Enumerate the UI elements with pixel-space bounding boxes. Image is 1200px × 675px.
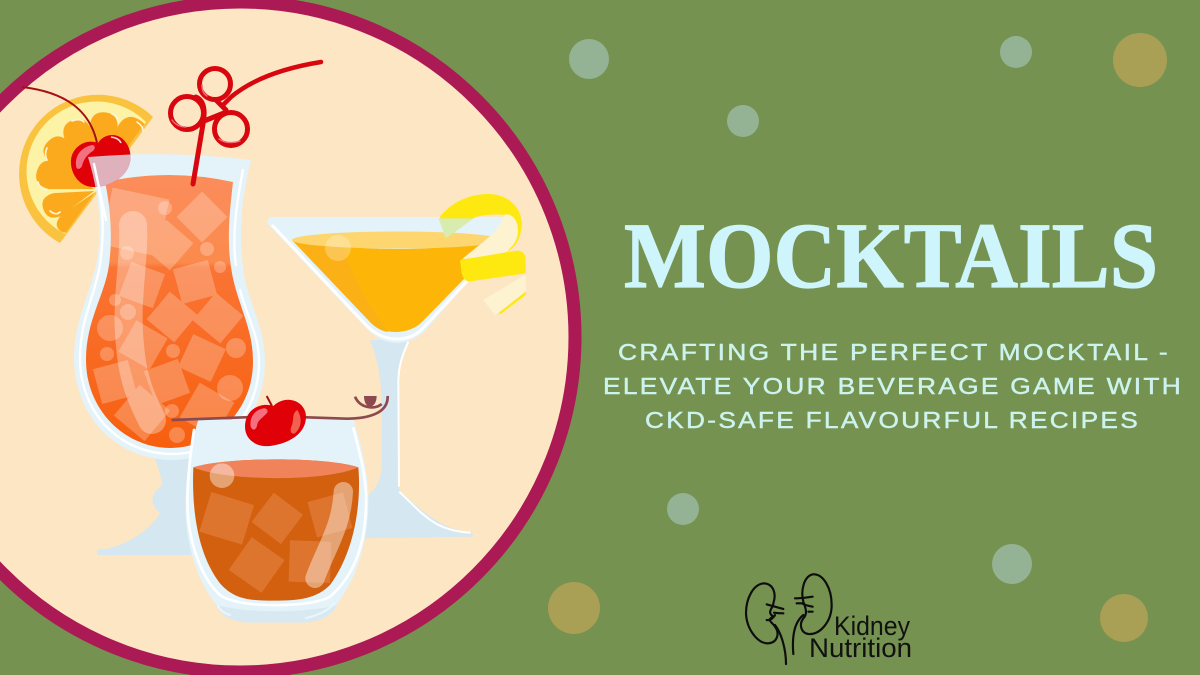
- subtitle: CRAFTING THE PERFECT MOCKTAIL -: [618, 339, 1170, 365]
- icon: hurricane glass: [74, 154, 265, 460]
- logo text: Nutrition: [809, 633, 912, 663]
- martini drink: [292, 240, 502, 332]
- icon: cherry on stick: [172, 396, 388, 446]
- icon: orange slice: [19, 95, 153, 243]
- icon: kidneys: [746, 574, 832, 664]
- glass highlights: [80, 165, 259, 454]
- icon: cherry stem: [22, 87, 97, 143]
- logo: Kidney Nutrition: [746, 574, 912, 664]
- icon: martini glass stem: [360, 340, 473, 538]
- subtitle: CKD-SAFE FLAVOURFUL RECIPES: [645, 407, 1140, 433]
- icon: lemon peel: [438, 194, 526, 315]
- logo text: [809, 611, 912, 663]
- title: MOCKTAILS: [624, 205, 1158, 308]
- subtitle: ELEVATE YOUR BEVERAGE GAME WITH: [603, 373, 1183, 399]
- tumbler drink: [193, 459, 359, 601]
- logo text: Kidney: [834, 611, 910, 641]
- drink: [86, 175, 253, 448]
- icon: cocktail illustration: [19, 62, 526, 623]
- ice cubes and bubbles: [93, 188, 246, 443]
- subtitle: [603, 339, 1183, 433]
- tumbler highlights: [187, 428, 366, 605]
- tumbler ice: [199, 492, 352, 593]
- decorative dots: [548, 33, 1167, 642]
- icon: red straw: [170, 62, 321, 184]
- icon: tumbler glass: [186, 419, 369, 623]
- icon: hurricane glass stem: [97, 458, 200, 555]
- icon: martini glass: [268, 217, 524, 343]
- icon: cherry on orange slice: [71, 135, 131, 220]
- circular panel with magenta ring: [0, 2, 575, 672]
